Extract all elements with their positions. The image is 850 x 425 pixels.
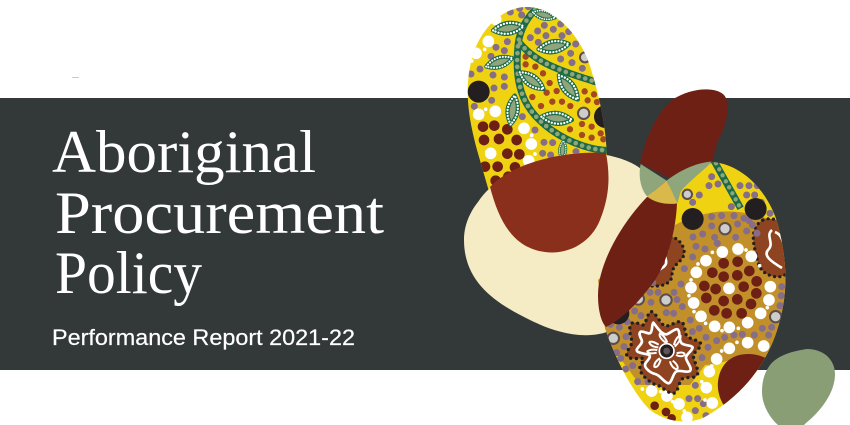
dark banner: [0, 98, 850, 370]
purple dots: [471, 7, 582, 155]
large flower: [627, 312, 701, 393]
dark red dots: [704, 286, 756, 313]
dark red inner blob: [718, 354, 765, 405]
overlap lens: [640, 162, 712, 204]
title: Policy: [55, 240, 202, 306]
ochre band: [598, 211, 790, 385]
rust blob: [490, 153, 608, 253]
title: Aboriginal: [52, 119, 316, 185]
purple dots: [611, 287, 782, 416]
black circles: [468, 81, 490, 103]
flower inner petals: [647, 333, 685, 369]
purple dots: [653, 177, 770, 284]
vine segment: [714, 161, 741, 208]
flower white outline: [637, 323, 693, 383]
white dots: [476, 19, 531, 161]
white dots: [652, 287, 770, 417]
upper dark red leaf: [640, 89, 728, 182]
green lobes: [640, 164, 667, 197]
black circle: [613, 310, 630, 324]
grey circles: [634, 295, 645, 306]
small mark: [72, 77, 79, 78]
lower dark red leaf: [598, 197, 677, 327]
top dotted oval: [468, 7, 607, 190]
dark red dots: [483, 126, 519, 181]
yellow lens: [647, 181, 677, 204]
subtitle: Performance Report 2021-22: [52, 325, 355, 350]
brown dots: [526, 57, 603, 139]
cream blob: [464, 153, 655, 335]
side flower left: [650, 236, 686, 288]
grey circles: [719, 223, 731, 234]
dark red dots: [712, 262, 757, 281]
title: [52, 119, 384, 306]
vine: [517, 10, 610, 151]
black circles: [682, 208, 704, 230]
title: Procurement: [55, 180, 384, 246]
flower centre: [659, 344, 674, 358]
bottom dotted oval: [598, 162, 786, 422]
grey circles: [578, 108, 589, 119]
white dots: [696, 249, 751, 272]
side flower right: [752, 217, 786, 278]
green blob: [762, 349, 835, 425]
leaves: [492, 21, 524, 36]
